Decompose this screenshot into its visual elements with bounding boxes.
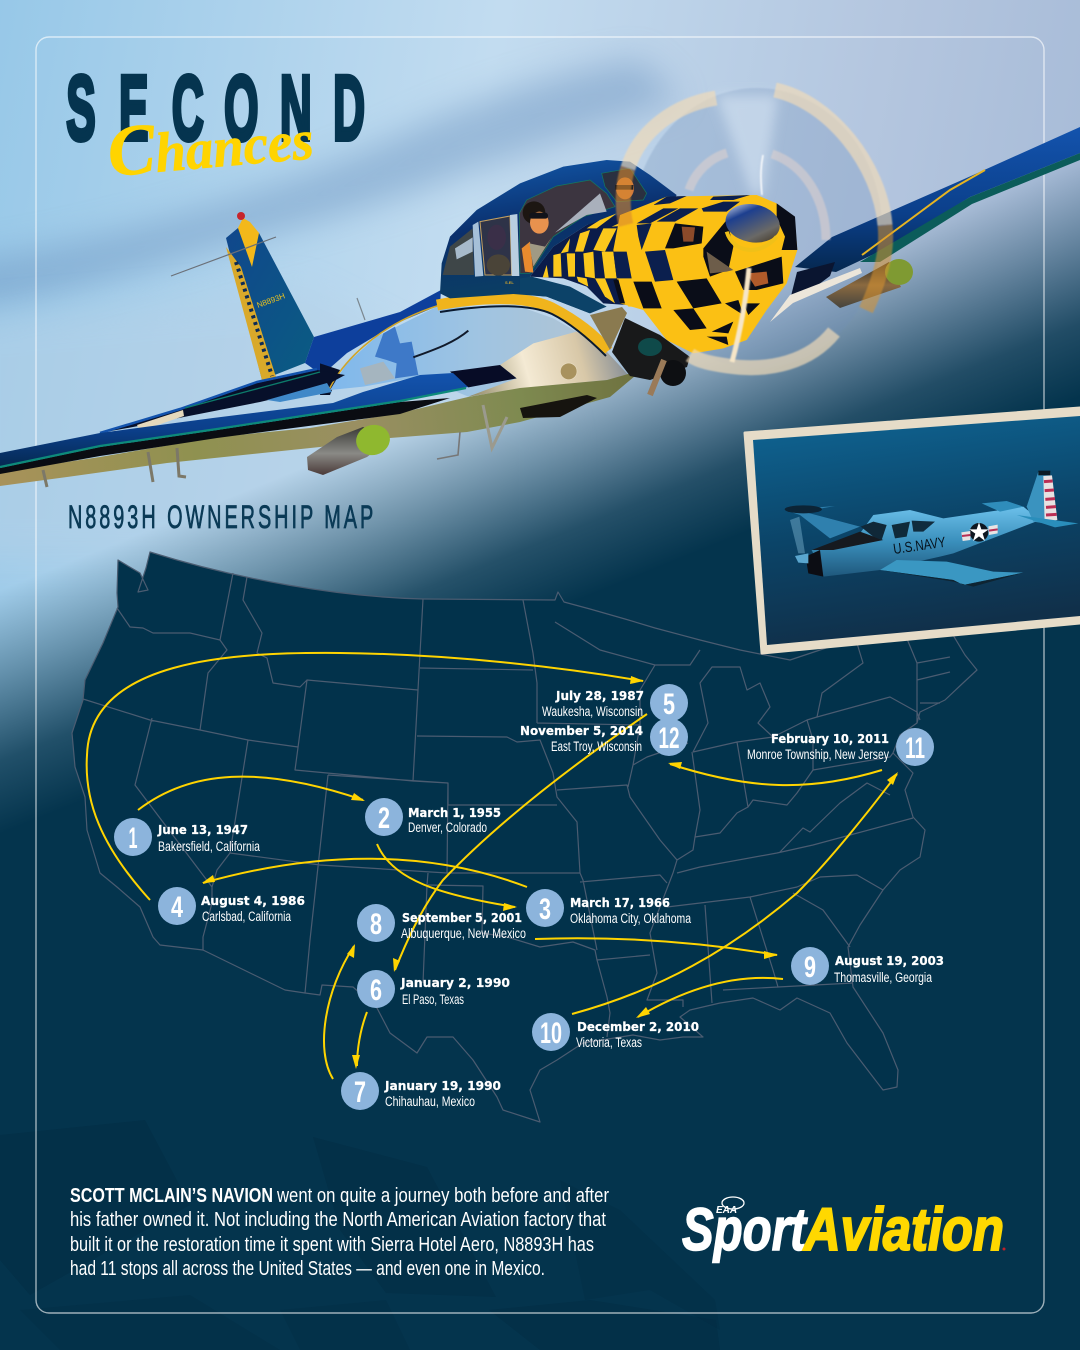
belly and landing gear: [437, 307, 690, 459]
photo plane: [785, 471, 1078, 587]
stop 6: El Paso: [357, 970, 510, 1008]
stop 8: Albuquerque: 8: [370, 908, 382, 941]
propeller disc: [632, 88, 882, 368]
stop 6: El Paso: 6: [370, 974, 382, 1007]
stop 6: El Paso: January 2, 1990: [400, 975, 510, 990]
tail fin with registration: N8893H: [256, 291, 286, 310]
stop 10: Victoria: December 2, 2010: [577, 1019, 699, 1034]
stop 9: Thomasville: 9: [804, 951, 816, 984]
logo: EAA Sport Aviation: EAA: [716, 1205, 737, 1216]
stop 8: Albuquerque: Albuquerque, New Mexico: [401, 926, 526, 941]
canopy and occupants: S.EL: [505, 280, 514, 285]
stop 10: Victoria: 10: [540, 1017, 562, 1050]
stop 12: East Troy: November 5, 2014: [520, 723, 643, 738]
stop 5: Waukesha: [542, 684, 688, 722]
stop 6: El Paso: El Paso, Texas: [402, 992, 464, 1007]
logo: EAA Sport Aviation: Aviation: [802, 1196, 1004, 1263]
stop 11: Monroe Township: February 10, 2011: [771, 731, 889, 746]
near wing: [0, 369, 642, 487]
stop 7: Chihuahua: 7: [354, 1076, 366, 1109]
stop 11: Monroe Township: [747, 728, 934, 766]
stop 4: Carlsbad: 4: [171, 891, 183, 924]
stop 5: Waukesha: 5: [663, 688, 675, 721]
body text paragraph: went on quite a journey both before and after: [276, 1185, 609, 1207]
photo plane: U.S.NAVY: [892, 535, 947, 558]
body text paragraph: his father owned it. Not including the North American Aviation factory that: [70, 1209, 606, 1231]
stop 1: Bakersfield: Bakersfield, California: [158, 839, 260, 854]
stop 9: Thomasville: Thomasville, Georgia: [834, 970, 932, 985]
stop 7: Chihuahua: Chihauhau, Mexico: [385, 1094, 475, 1109]
map of the United States with state borders: [72, 552, 977, 1122]
title: Second Chances: SECOND: [66, 58, 365, 160]
stop 2: Denver: Denver, Colorado: [408, 820, 487, 835]
stop 7: Chihuahua: January 19, 1990: [384, 1078, 501, 1093]
stop 3: Oklahoma City: March 17, 1966: [570, 895, 670, 910]
stop 9: Thomasville: August 19, 2003: [835, 953, 944, 968]
stop 9: Thomasville: [791, 947, 944, 985]
stop 11: Monroe Township: Monroe Township, New Jersey: [747, 747, 889, 762]
stop 3: Oklahoma City: [526, 889, 691, 927]
title: Second Chances: Chances: [104, 95, 316, 192]
body text paragraph: built it or the restoration time it spent with Sierra Hotel Aero, N8893H has: [70, 1234, 594, 1256]
logo: EAA Sport Aviation: [682, 1196, 1006, 1263]
front checkered cowling with spinner: [613, 195, 797, 353]
stop 12: East Troy: 12: [658, 722, 680, 755]
route arrows between ownership stops: [87, 653, 898, 1079]
propeller arcs: [623, 90, 886, 368]
body text paragraph: [70, 1185, 609, 1280]
stop 12: East Troy: [520, 718, 688, 756]
stop 4: Carlsbad: Carlsbad, California: [202, 909, 291, 924]
stop 2: Denver: 2: [378, 802, 390, 835]
heading: ownership map: N8893H OWNERSHIP MAP: [68, 499, 376, 535]
stop 3: Oklahoma City: 3: [539, 893, 551, 926]
stop 12: East Troy: East Troy, Wisconsin: [551, 739, 642, 754]
logo: EAA Sport Aviation: Sport: [682, 1196, 808, 1263]
stop 2: Denver: [365, 798, 501, 836]
stop 5: Waukesha: Waukesha, Wisconsin: [542, 704, 643, 719]
stop 3: Oklahoma City: Oklahoma City, Oklahoma: [570, 911, 691, 926]
rear checkered cowling: [530, 205, 650, 307]
canopy and occupants: [440, 160, 677, 313]
stop 8: Albuquerque: September 5, 2001: [402, 910, 522, 925]
body text paragraph: had 11 stops all across the United States — and even one in Mexico.: [70, 1258, 545, 1280]
stop 10: Victoria: [532, 1013, 699, 1051]
stop 8: Albuquerque: [357, 904, 526, 942]
stop 4: Carlsbad: August 4, 1986: [201, 893, 305, 908]
framed historical photo of Navy plane: [745, 408, 1080, 653]
stop 4: Carlsbad: [158, 887, 305, 925]
stop 1: Bakersfield: June 13, 1947: [157, 822, 248, 837]
main airplane illustration: [0, 88, 1080, 487]
stop 5: Waukesha: July 28, 1987: [555, 688, 644, 703]
stop 2: Denver: March 1, 1955: [408, 805, 501, 820]
stop 7: Chihuahua: [341, 1072, 501, 1110]
stop 1: Bakersfield: 1: [128, 822, 138, 855]
stop 11: Monroe Township: 11: [905, 732, 925, 765]
stop 1: Bakersfield: [114, 818, 260, 856]
tail fin with registration: [171, 212, 314, 380]
fuselage: [305, 290, 628, 397]
far wing: [770, 127, 1080, 322]
stop 10: Victoria: Victoria, Texas: [576, 1035, 642, 1050]
body text paragraph: SCOTT MCLAIN’S NAVION: [70, 1185, 273, 1207]
